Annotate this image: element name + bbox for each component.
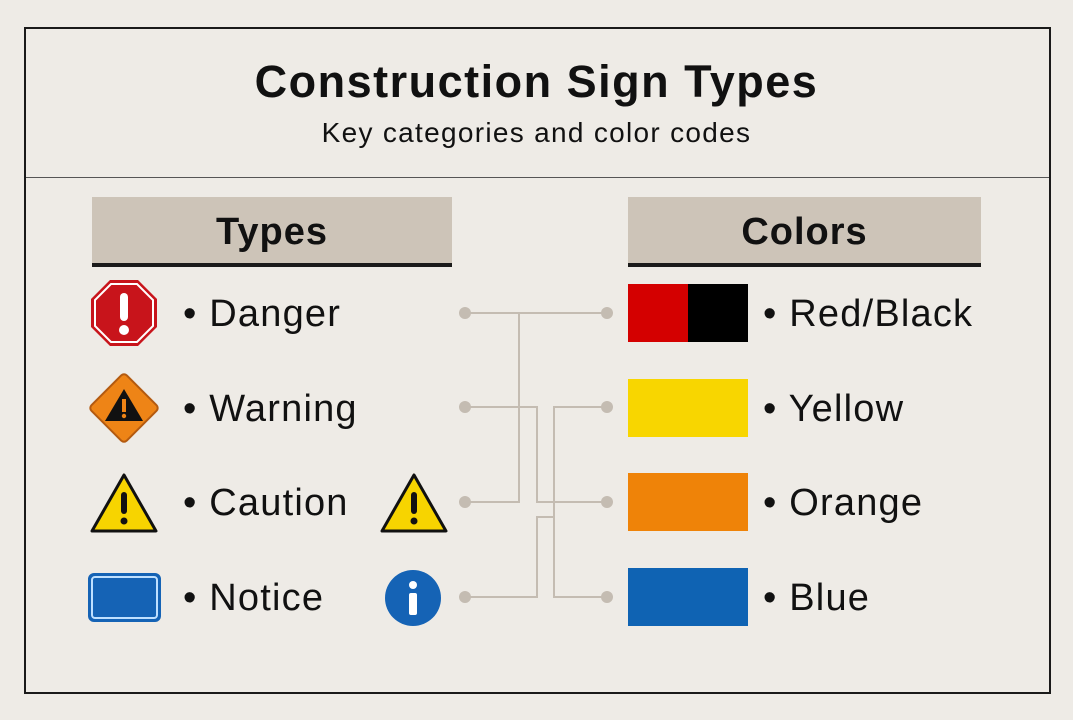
label: Notice: • Notice (183, 577, 324, 619)
label: Red/Black: • Red/Black (763, 293, 973, 335)
icon: caution triangle small (380, 473, 448, 532)
swatch: yellow (628, 379, 748, 437)
divider line (26, 177, 1049, 178)
header: Types (92, 197, 452, 267)
label: Orange: • Orange (763, 482, 923, 524)
header: Types: Types (216, 211, 328, 253)
label: Warning: • Warning (183, 388, 358, 430)
title: Construction Sign Types (255, 56, 818, 107)
subtitle: Key categories and color codes (322, 117, 751, 148)
label: Yellow: • Yellow (763, 388, 904, 430)
label: Blue: • Blue (763, 577, 870, 619)
label: Caution: • Caution (183, 482, 349, 524)
label: Danger: • Danger (183, 293, 341, 335)
icon: caution triangle (90, 473, 158, 532)
header: Colors: Colors (741, 211, 868, 253)
swatch: blue (628, 568, 748, 626)
icon: danger octagon (91, 280, 157, 346)
swatch: red/black (628, 284, 748, 342)
icon: notice rectangle (88, 573, 161, 622)
icon: warning diamond (89, 373, 159, 443)
header: Colors (628, 197, 981, 267)
swatch: orange (628, 473, 748, 531)
icon: info circle (385, 570, 441, 626)
